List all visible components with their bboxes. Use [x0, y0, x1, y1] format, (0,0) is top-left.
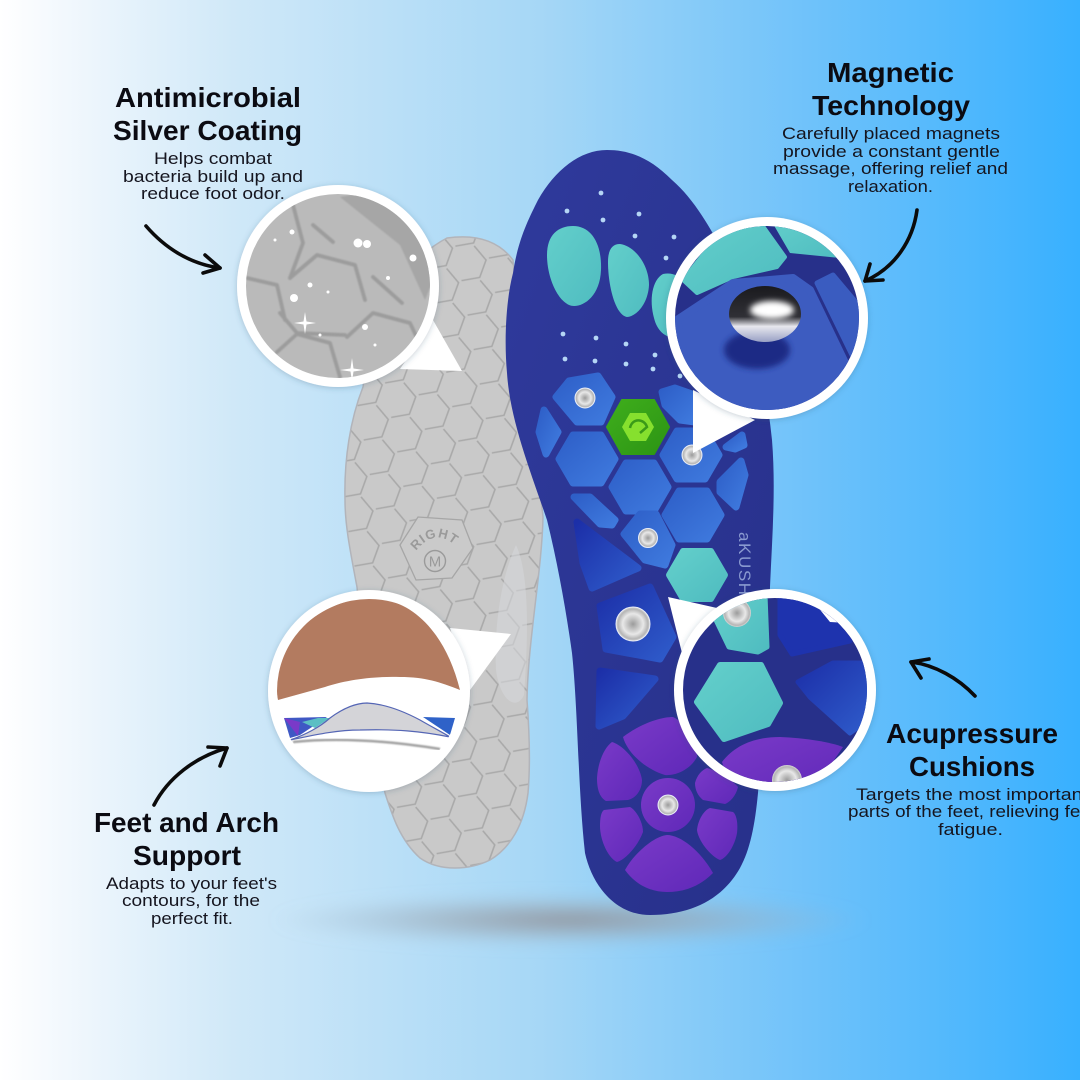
arrow: to silver coating	[146, 226, 220, 273]
description: perfect fit.	[151, 910, 233, 928]
size mark M	[424, 550, 446, 572]
heading: Support	[133, 840, 241, 871]
description	[106, 875, 277, 928]
heading: Magnetic	[827, 57, 954, 88]
description: bacteria build up and	[123, 168, 303, 186]
heading: Silver Coating	[113, 115, 302, 146]
description: fatigue.	[938, 821, 1003, 839]
description: contours, for the	[122, 892, 260, 910]
teal midfoot hexagon	[669, 551, 725, 599]
description: parts of the feet, relieving feet	[848, 803, 1080, 821]
arrow: to arch support	[154, 747, 227, 805]
grey insole underside	[344, 236, 544, 869]
text: feet and arch support	[94, 807, 279, 928]
pointer	[693, 390, 755, 453]
text: magnetic technology	[773, 57, 1008, 196]
arrow: to acupressure	[911, 659, 975, 696]
panel: silver coating zoom circle	[237, 185, 462, 390]
text: acupressure cushions	[848, 718, 1080, 839]
heading	[886, 718, 1058, 782]
deep blue midfoot cushions	[577, 522, 673, 726]
pointer	[400, 320, 462, 371]
ground shadow	[270, 893, 870, 947]
description	[123, 150, 303, 203]
purple heel cushions	[597, 717, 738, 892]
description: provide a constant gentle	[783, 143, 1000, 161]
panel: magnetic technology zoom circle	[666, 217, 870, 453]
speckle dots	[561, 191, 682, 378]
description: Targets the most important	[856, 786, 1080, 804]
description: Adapts to your feet's	[106, 875, 277, 893]
heading: Acupressure	[886, 718, 1058, 749]
description: Helps combat	[154, 150, 272, 168]
heading	[812, 57, 970, 121]
teal toe cushions	[547, 226, 684, 338]
steel magnets on the insole	[575, 388, 702, 815]
description: relaxation.	[848, 178, 933, 196]
blue forefoot cushions	[539, 376, 745, 565]
green hexagon badge	[607, 400, 669, 454]
magnet dome	[729, 286, 801, 342]
heading: Feet and Arch	[94, 807, 279, 838]
heading	[113, 82, 302, 146]
panel: arch support zoom circle	[268, 590, 511, 792]
heading	[94, 807, 279, 871]
heading: Technology	[812, 90, 970, 121]
pointer	[450, 628, 511, 690]
brand name: aKUSHE	[735, 532, 754, 610]
heading: Antimicrobial	[115, 82, 301, 113]
text: antimicrobial silver coating	[113, 82, 303, 203]
description: Carefully placed magnets	[782, 125, 1000, 143]
arrow: to magnet	[865, 210, 917, 281]
size mark hexagon	[400, 517, 473, 580]
description: massage, offering relief and	[773, 160, 1008, 178]
heading: Cushions	[909, 751, 1035, 782]
size mark RIGHT: RIGHT	[410, 528, 459, 550]
description: reduce foot odor.	[141, 185, 285, 203]
arch gel highlight	[496, 545, 527, 703]
pointer	[668, 597, 717, 653]
description	[773, 125, 1008, 196]
description	[848, 786, 1080, 839]
size mark M: M	[429, 554, 441, 570]
blue insole top	[506, 150, 774, 915]
panel: acupressure zoom circle	[668, 589, 876, 795]
